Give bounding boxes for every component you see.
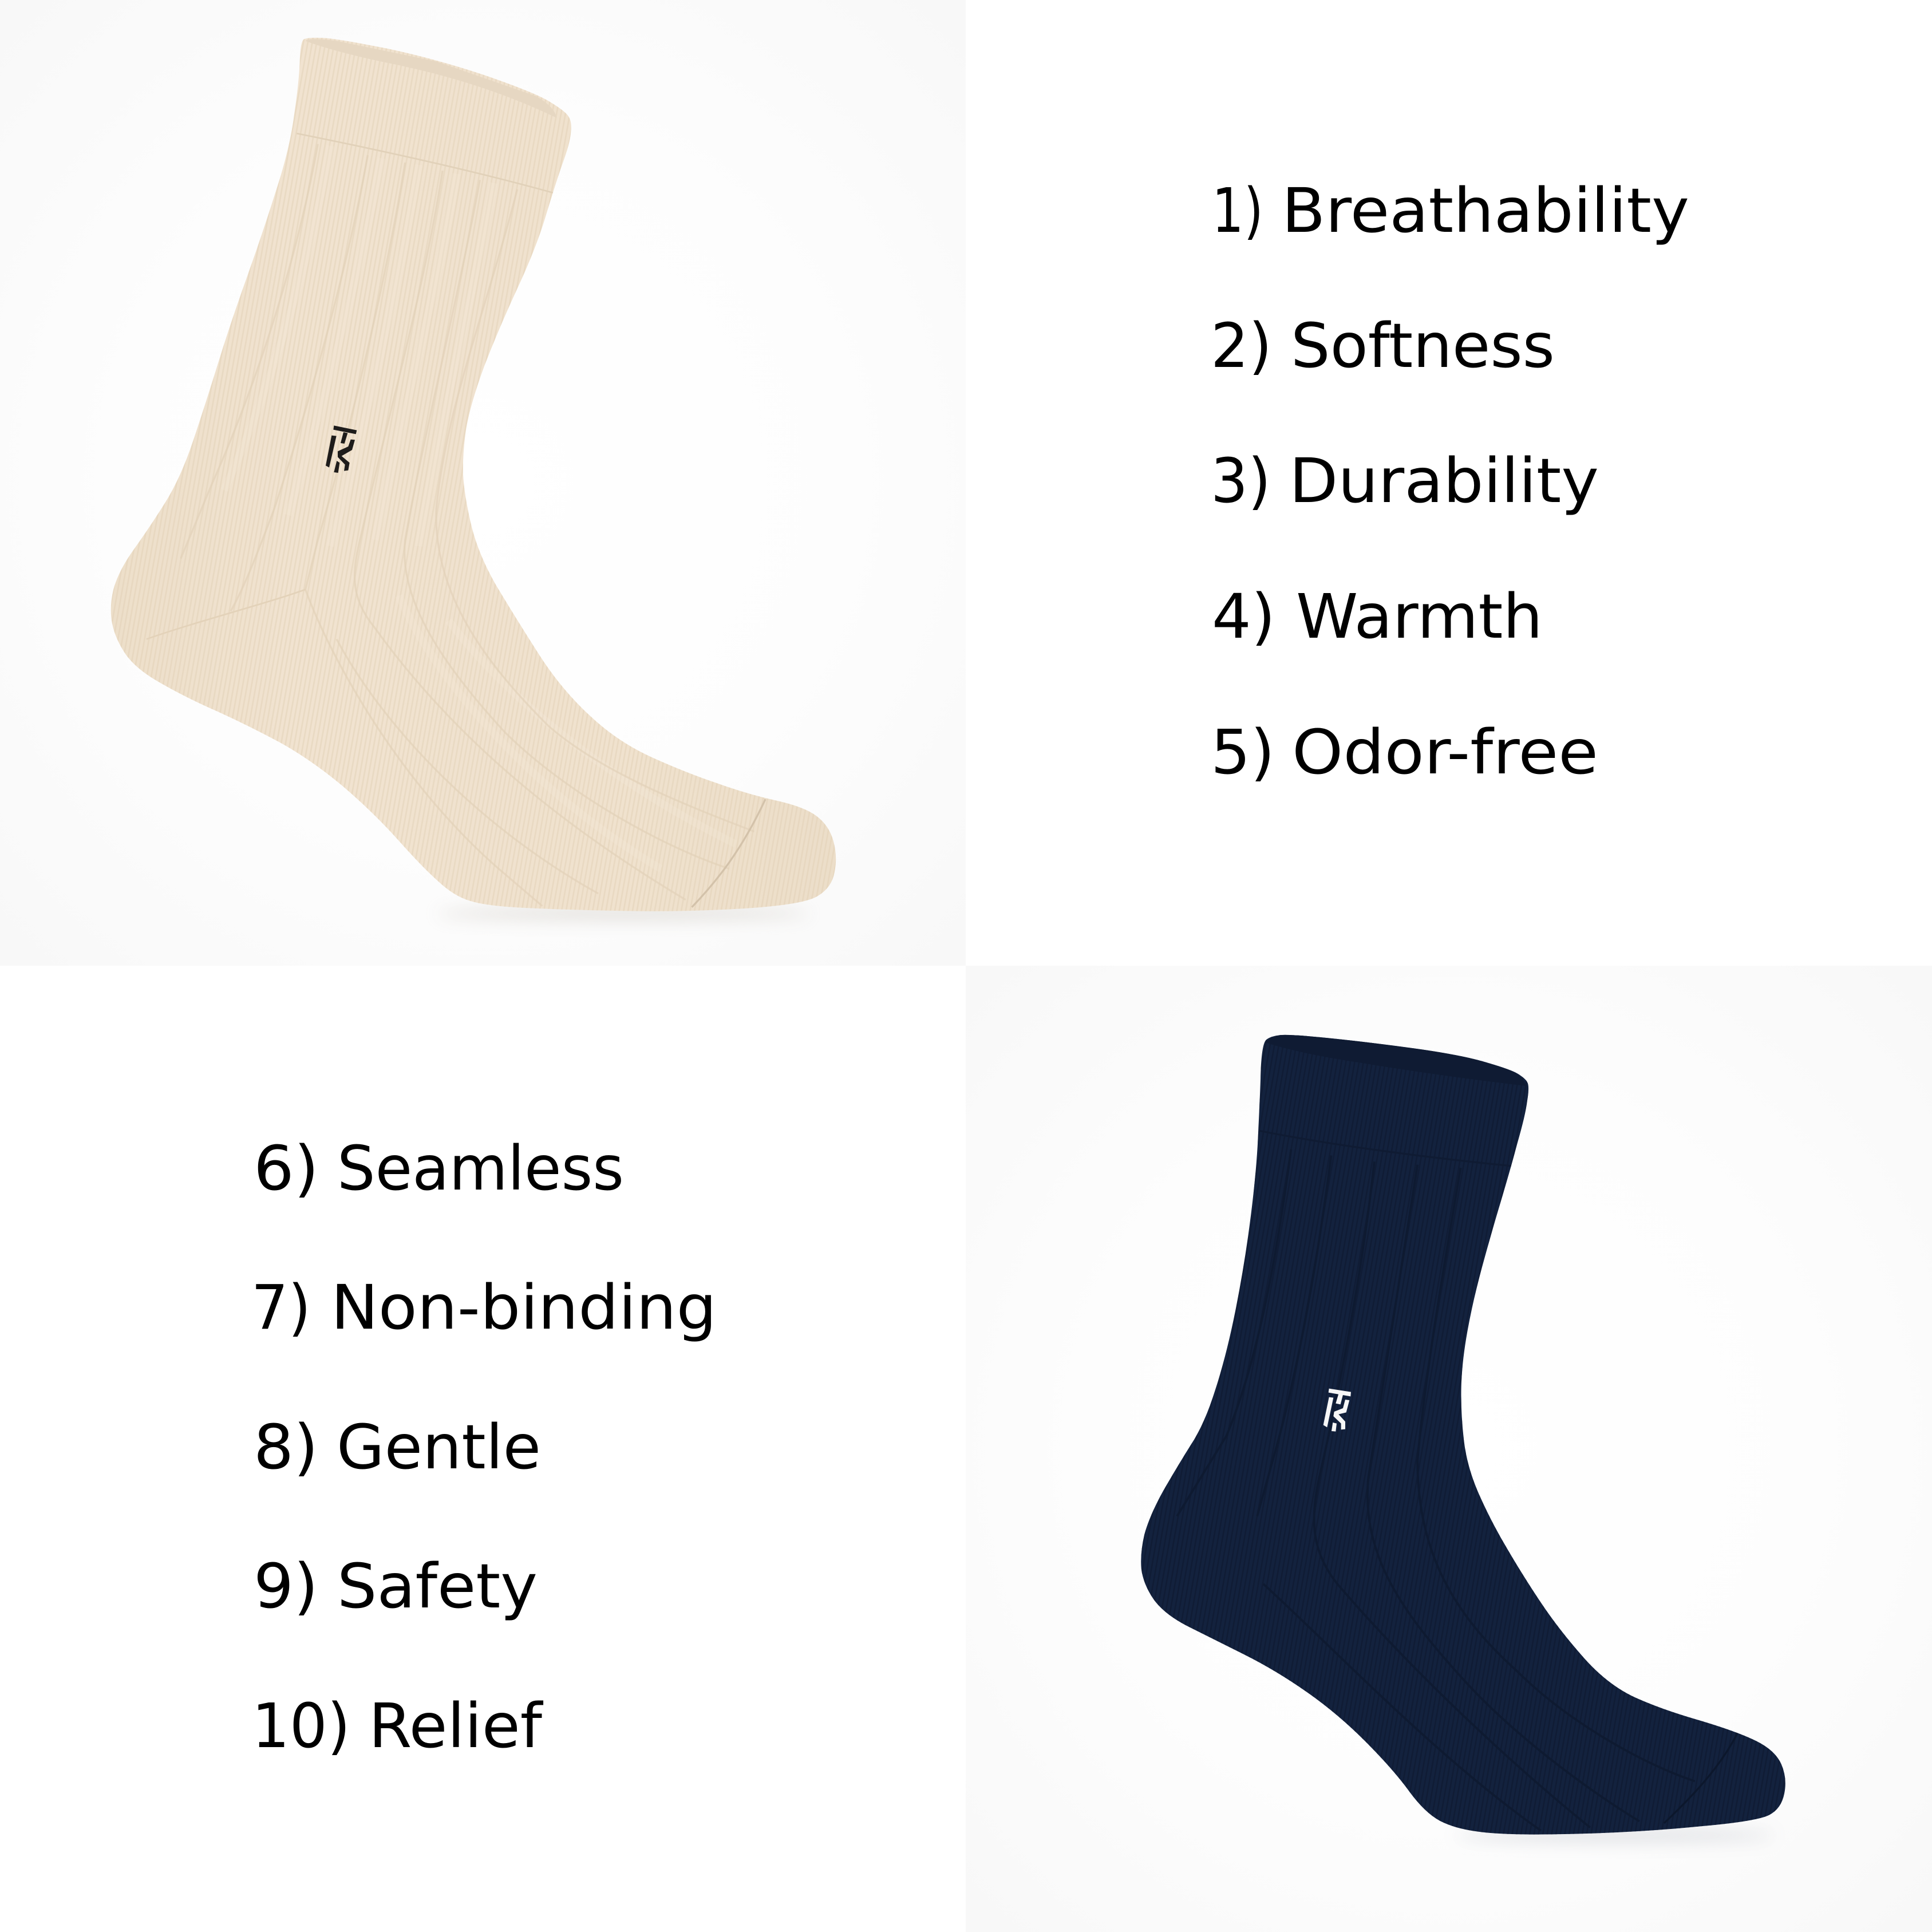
text: item 9 <box>254 1551 538 1622</box>
text: item 9: 9) <box>254 1551 318 1622</box>
text: item 3: 3) <box>1211 446 1271 517</box>
text: item 10: Relief <box>369 1691 543 1762</box>
text: item 10 <box>252 1691 543 1762</box>
text: item 8: Gentle <box>337 1412 541 1483</box>
text: item 5: 5) <box>1211 717 1275 788</box>
panel: beige sock photo <box>111 38 836 930</box>
text: item 1: Breathability <box>1282 176 1689 247</box>
icon: navy ribbed crew sock <box>1128 1029 1800 1843</box>
text: item 6: 6) <box>254 1133 319 1204</box>
text: item 6: Seamless <box>337 1133 624 1204</box>
icon: TK logo on navy sock <box>1323 1389 1351 1432</box>
text: item 2: Softness <box>1291 311 1555 382</box>
text: item 7: 7) <box>251 1273 311 1344</box>
text: item 4: 4) <box>1212 582 1275 653</box>
panel: feature list 1 to 5 <box>1211 176 1689 788</box>
text: item 2: 2) <box>1211 311 1272 382</box>
icon: TK logo on beige sock <box>326 425 357 473</box>
text: item 9: Safety <box>337 1551 538 1622</box>
icon: beige ribbed crew sock <box>93 31 854 919</box>
text: item 5: Odor-free <box>1292 717 1598 788</box>
text: item 1: 1) <box>1212 176 1263 247</box>
panel: feature list 6 to 10 <box>251 1133 717 1762</box>
text: item 7: Non-binding <box>331 1273 717 1344</box>
panel: navy sock photo <box>1141 1035 1785 1850</box>
text: item 10: 10) <box>252 1691 350 1762</box>
text: item 3: Durability <box>1289 446 1599 517</box>
text: item 8: 8) <box>254 1412 318 1483</box>
text: item 4: Warmth <box>1296 582 1543 653</box>
